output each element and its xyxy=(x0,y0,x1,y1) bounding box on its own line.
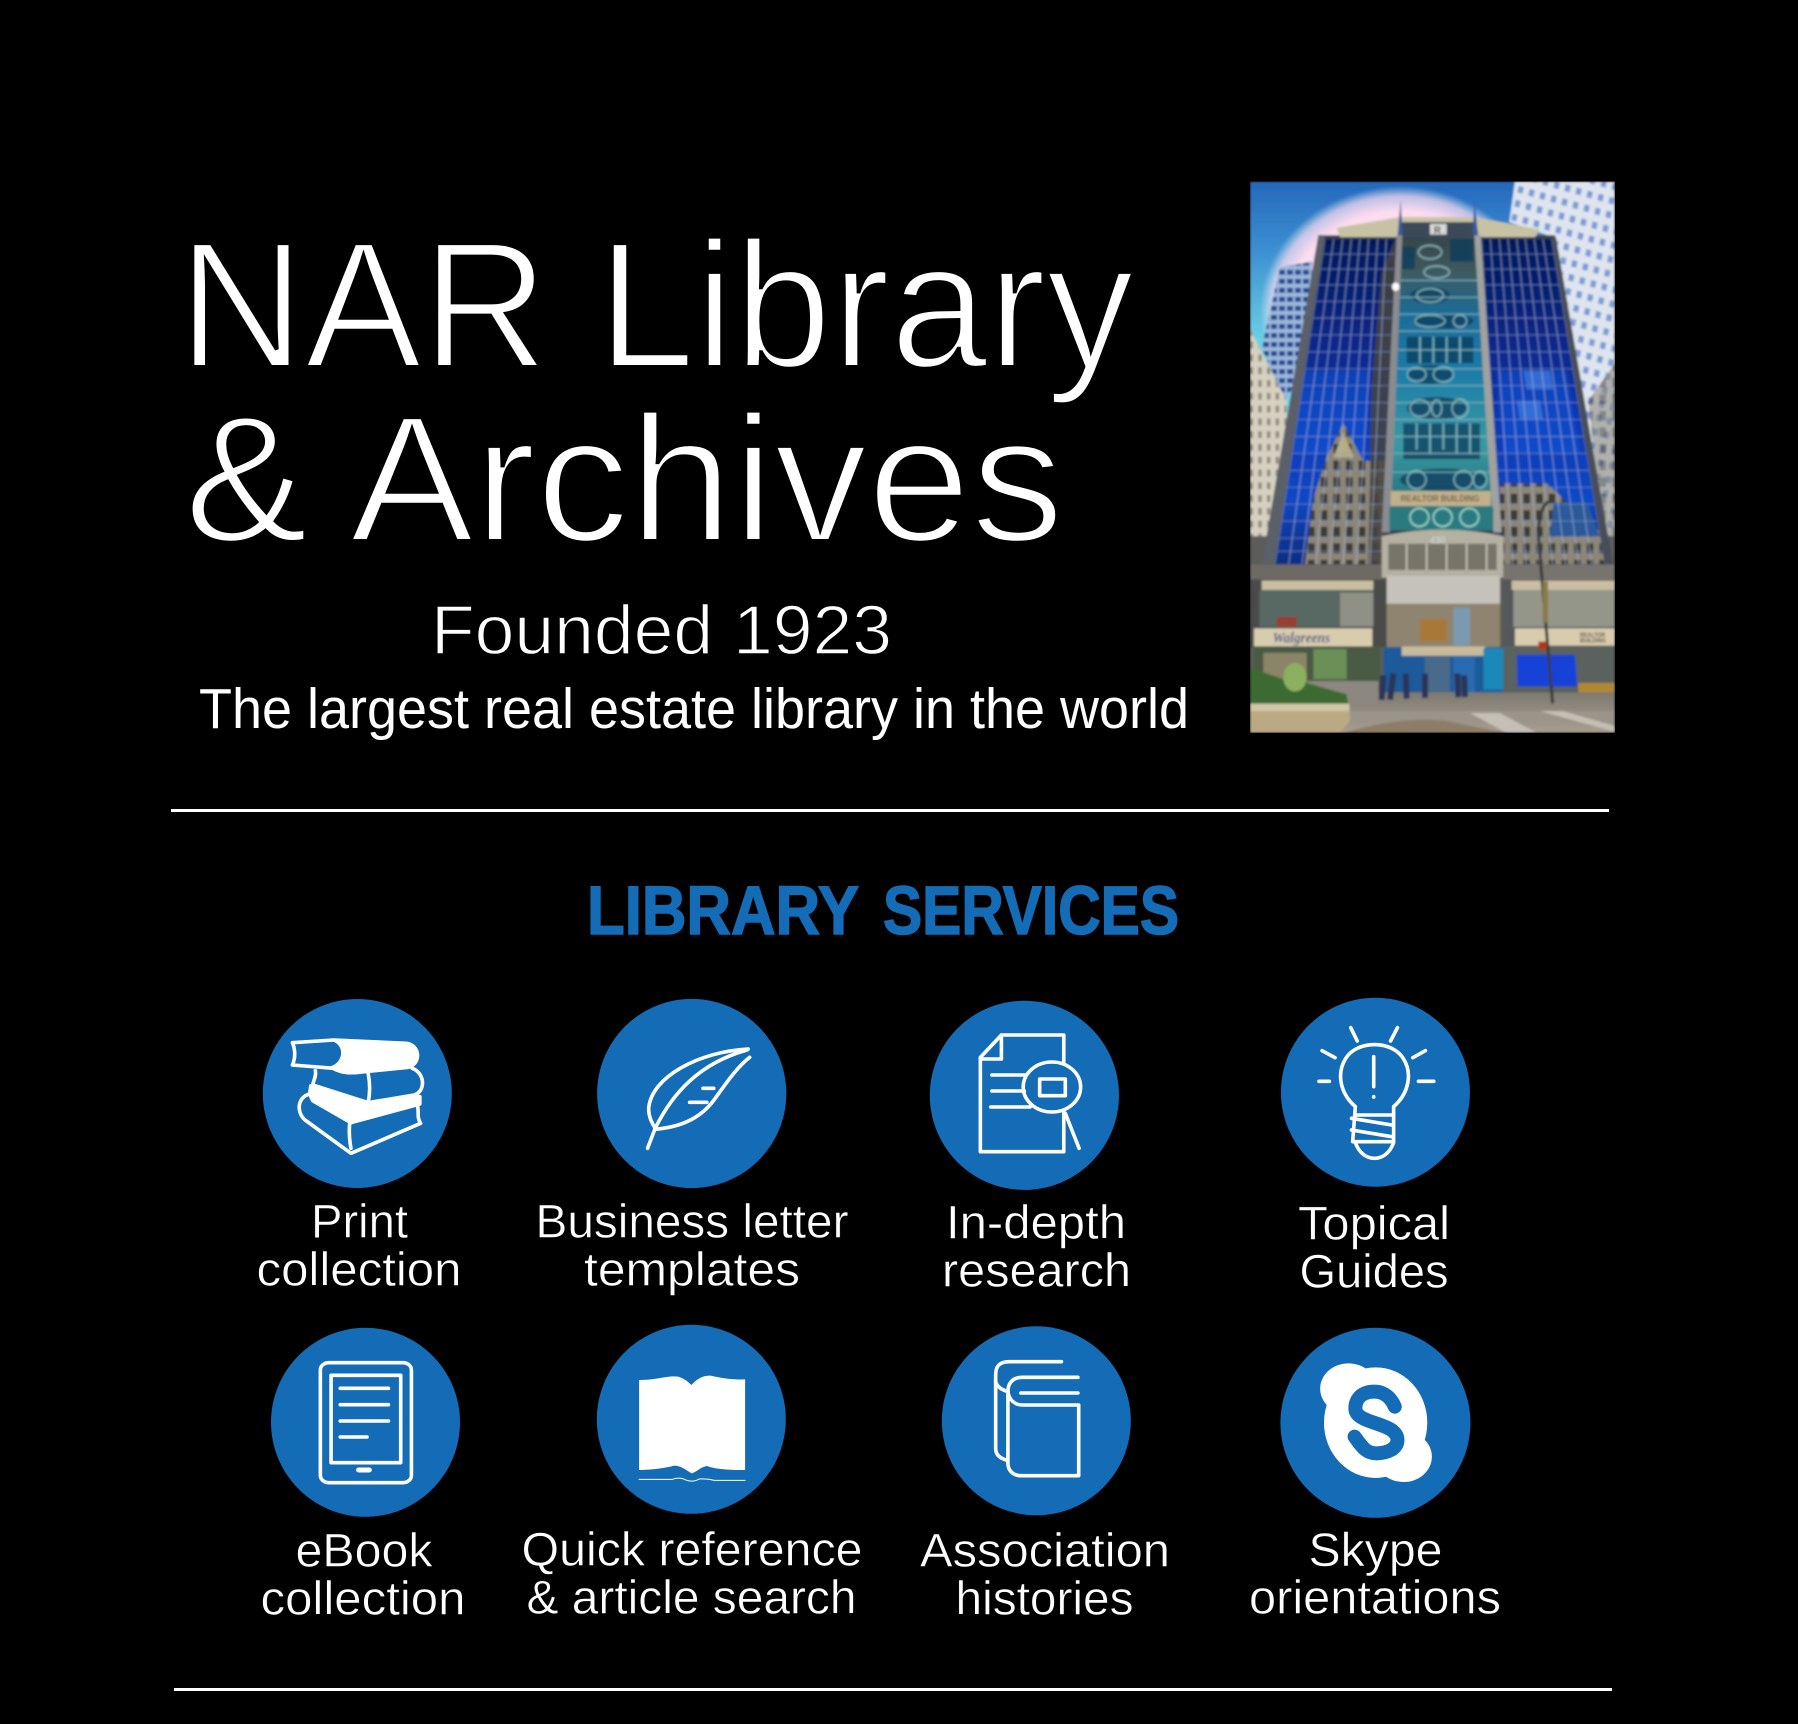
label xyxy=(1298,1196,1450,1298)
label: eBook xyxy=(296,1524,433,1577)
photo: Realtor Building: R xyxy=(1434,225,1441,237)
label: orientations xyxy=(1249,1571,1501,1624)
circle badge xyxy=(271,1328,460,1517)
title: & Archives xyxy=(184,379,1064,580)
divider xyxy=(171,809,1609,812)
label xyxy=(920,1524,1170,1624)
label: collection xyxy=(256,1242,462,1295)
subtitle: founded: Founded 1923 xyxy=(431,591,892,669)
label: Quick reference xyxy=(522,1523,862,1576)
label: Skype xyxy=(1308,1523,1442,1576)
photo: Realtor Building: REALTOR xyxy=(1580,633,1605,639)
label: In-depth xyxy=(946,1195,1126,1248)
label: Association xyxy=(920,1524,1170,1577)
service: print collection xyxy=(256,999,462,1295)
tagline: The largest real estate library in the world xyxy=(199,677,1189,741)
title xyxy=(178,205,1134,580)
photo: Realtor Building: BUILDING xyxy=(1580,638,1606,645)
icon: stack of books xyxy=(292,1040,422,1153)
label: Business letter xyxy=(536,1195,848,1248)
icon: document with magnifier xyxy=(980,1035,1081,1152)
circle badge xyxy=(263,999,452,1188)
title: NAR Library xyxy=(178,205,1134,406)
label xyxy=(256,1195,462,1295)
icon: skype logo xyxy=(1320,1363,1432,1482)
service: quick reference and article search xyxy=(522,1325,862,1624)
service: skype orientations xyxy=(1249,1328,1501,1624)
circle badge xyxy=(942,1326,1131,1515)
divider xyxy=(174,1688,1612,1691)
circle badge xyxy=(597,1325,786,1514)
label: histories xyxy=(956,1571,1134,1624)
label xyxy=(1249,1523,1501,1624)
label xyxy=(536,1195,848,1295)
service: ebook collection xyxy=(260,1328,466,1624)
icon: light bulb xyxy=(1319,1028,1434,1158)
photo: Realtor Building: Walgreens xyxy=(1273,630,1331,647)
heading: library services: SERVICES xyxy=(883,872,1179,949)
service: association histories xyxy=(920,1326,1170,1624)
label xyxy=(260,1524,466,1624)
icon: feather quill xyxy=(648,1049,750,1148)
label: Guides xyxy=(1300,1245,1448,1298)
service: topical guides xyxy=(1281,998,1470,1298)
label: research xyxy=(942,1243,1131,1296)
heading: library services: LIBRARY xyxy=(587,872,859,949)
label: Print xyxy=(311,1195,408,1248)
circle badge xyxy=(930,1001,1119,1190)
service: business letter templates xyxy=(536,999,848,1295)
label: templates xyxy=(584,1242,800,1295)
circle badge xyxy=(1281,998,1470,1187)
icon: two books xyxy=(996,1362,1079,1476)
icon: open book xyxy=(639,1376,745,1481)
label: & article search xyxy=(526,1571,856,1624)
photo: Realtor Building xyxy=(1250,181,1615,733)
service: in-depth research xyxy=(930,1001,1131,1296)
photo: Realtor Building: 430 xyxy=(1430,535,1446,547)
icon: tablet xyxy=(320,1363,411,1483)
photo: Realtor Building: REALTOR BUILDING xyxy=(1401,493,1480,504)
heading: library services xyxy=(587,872,1179,949)
label xyxy=(942,1195,1131,1296)
label xyxy=(522,1523,862,1624)
label: Topical xyxy=(1298,1196,1450,1249)
circle badge xyxy=(1280,1328,1470,1518)
circle badge xyxy=(597,999,786,1188)
label: collection xyxy=(260,1571,466,1624)
